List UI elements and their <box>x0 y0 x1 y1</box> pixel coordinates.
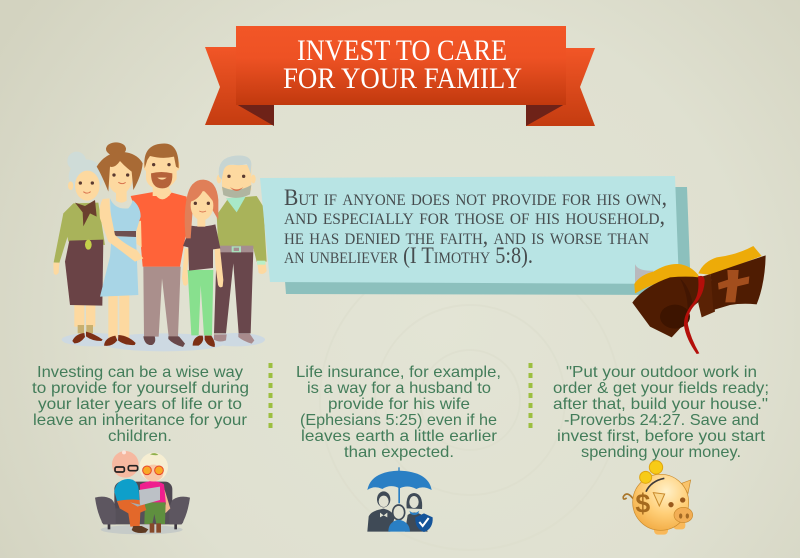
text: column three: invest first, before you start <box>557 428 766 445</box>
ribbon right tail <box>526 48 595 126</box>
text: column one: to provide for yourself during <box>32 380 249 397</box>
text: column two: is a way for a husband to <box>307 380 491 397</box>
icon: piggy bank with coins <box>623 461 693 535</box>
title text: FOR YOUR FAMILY <box>283 62 522 95</box>
panel face <box>260 176 679 284</box>
quote panel <box>260 176 691 295</box>
spine <box>698 274 715 317</box>
ribbon right fold <box>526 104 565 126</box>
grandmother <box>53 152 105 343</box>
text: column two: (Ephesians 5:25) even if he <box>300 412 497 429</box>
ground shadow <box>62 333 265 351</box>
text: column three: after that, build your house." <box>553 396 768 413</box>
left cover <box>632 277 699 337</box>
text: column one: Investing can be a wise way <box>37 364 243 381</box>
text: column three: -Proverbs 24:27. Save and <box>564 412 759 429</box>
icon: piggy bank with coins: $ <box>635 489 650 519</box>
ribbon main band <box>236 26 566 105</box>
panel shadow <box>285 187 691 295</box>
scripture quote: an unbeliever (I Timothy 5:8). <box>284 243 533 268</box>
text: column two: leaves earth a little earlier <box>301 428 498 445</box>
text: column two: provide for his wife <box>328 396 470 413</box>
ribbon bookmark <box>684 276 705 354</box>
icon: open bible <box>632 246 766 354</box>
title ribbon banner <box>205 26 595 126</box>
cross <box>718 270 749 302</box>
scripture quote: But if anyone does not provide for his own, <box>284 185 667 210</box>
text: column three: order & get your fields ready; <box>553 380 769 397</box>
right cover <box>711 255 766 310</box>
grandfather <box>214 156 267 344</box>
text: column one: children. <box>108 428 172 445</box>
divider left <box>268 363 272 428</box>
text: column three: "Put your outdoor work in <box>566 364 757 381</box>
text: column one: leave an inheritance for your <box>33 412 248 429</box>
mother <box>97 142 143 346</box>
text: column two: than expected. <box>344 444 454 461</box>
illustration: family of five <box>53 142 267 351</box>
father <box>131 144 187 347</box>
text: column two: Life insurance, for example, <box>296 364 501 381</box>
title text: INVEST TO CARE <box>297 34 507 67</box>
daughter <box>182 180 223 347</box>
scripture quote: and especially for those of his household, <box>284 204 665 229</box>
divider right <box>528 363 532 428</box>
icon: elderly couple on sofa <box>95 450 190 534</box>
icon: family under umbrella <box>367 467 433 532</box>
gold page edges <box>634 246 762 293</box>
scripture quote: he has denied the faith, and is worse than <box>284 224 649 249</box>
text: column three: spending your money. <box>581 444 741 461</box>
text: column one: your later years of life or to <box>38 396 242 413</box>
ribbon left fold <box>236 104 274 126</box>
ribbon left tail <box>205 47 274 125</box>
